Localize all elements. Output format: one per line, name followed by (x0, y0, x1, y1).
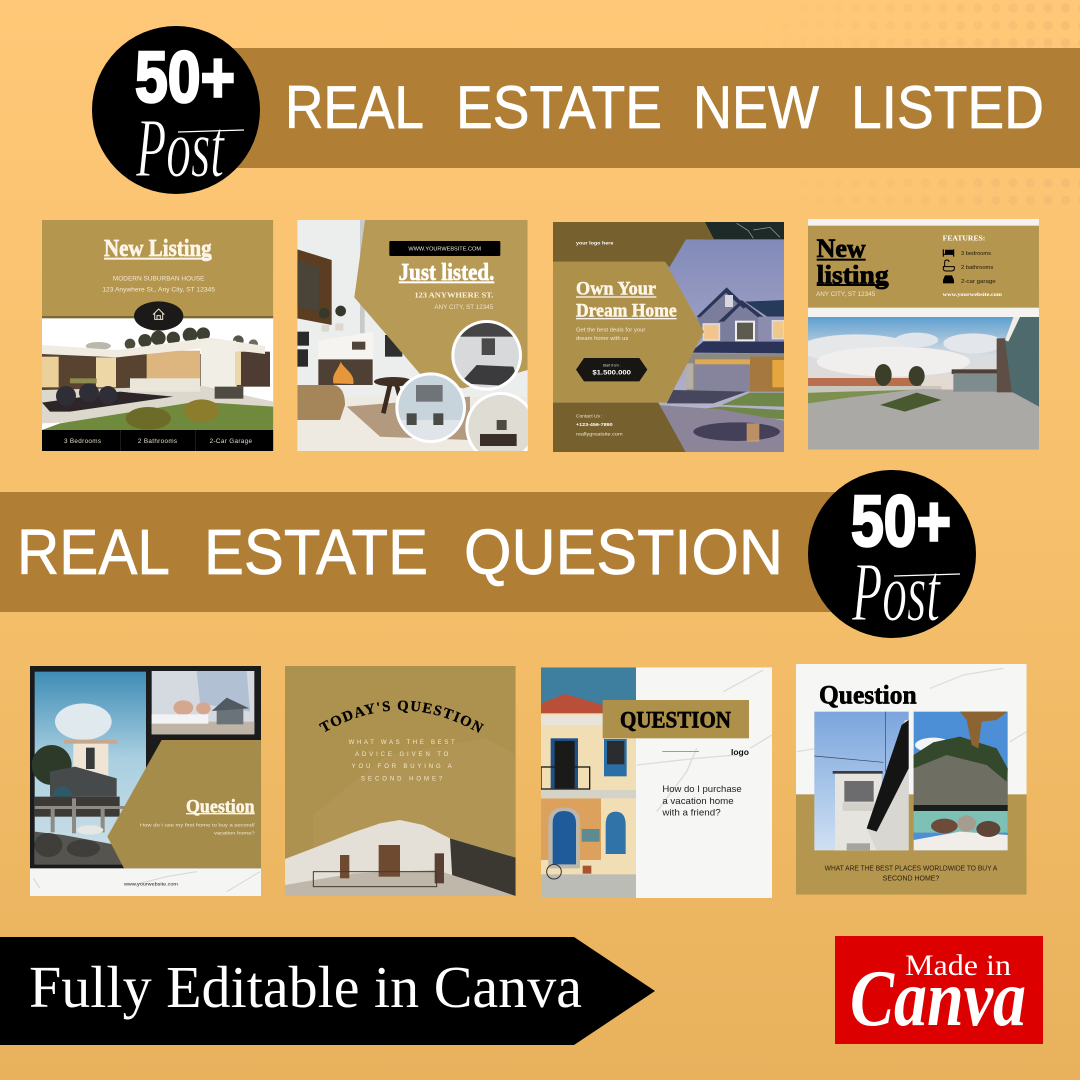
panel: question first home (30, 666, 261, 896)
address: ANY CITY, ST 12345 (434, 304, 494, 311)
photo: living room with fireplace (297, 220, 528, 451)
question text: SECOND HOME? (361, 776, 443, 782)
heading box: QUESTION (620, 707, 731, 733)
icon: car (943, 275, 954, 283)
features list (943, 234, 1002, 298)
gold arrow block (107, 740, 261, 868)
address: 123 ANYWHERE ST. (414, 290, 494, 299)
heading box (603, 700, 749, 738)
title: Question (819, 680, 917, 710)
panel: question best places (796, 664, 1027, 895)
title: Just listed. (399, 259, 494, 286)
icon: bath (943, 260, 954, 271)
photo circles (395, 320, 528, 451)
panel: today's question (285, 666, 516, 896)
heading: real estate question: QUESTION (464, 516, 783, 588)
question text: ADVICE GIVEN TO (355, 752, 449, 758)
address (415, 292, 493, 310)
badge: 50+ post middle: 50+ (851, 482, 951, 562)
url pill (389, 241, 500, 256)
marble footer: www.yourwebsite.com (124, 882, 178, 888)
question text: How do I use my first home to buy a second/ (140, 822, 255, 828)
question text: vacation home? (214, 831, 255, 837)
question text: WHAT WAS THE BEST (349, 740, 455, 746)
contact: Contact Us : (576, 413, 603, 419)
heading: real estate question (17, 516, 783, 588)
panel: new listing modern suburban house (42, 220, 273, 451)
photo: lakefront patio (800, 317, 1039, 450)
icon: house in black oval (134, 301, 183, 331)
photo: suburban house at dusk (658, 287, 784, 452)
address text: 123 Anywhere St., Any City, ST 12345 (102, 287, 215, 294)
features list: 3 bedrooms (961, 251, 991, 257)
photo: beach house (32, 672, 146, 864)
dark olive top band (553, 222, 714, 267)
logo: logo (731, 748, 749, 757)
heading: real estate question: ESTATE (204, 516, 428, 588)
description: Get the best deals for your (576, 328, 646, 334)
photo: blue-door house (541, 667, 636, 898)
curved heading: TODAY'S QUESTION (318, 700, 484, 733)
features list: 2 bathrooms (961, 265, 994, 271)
text: fully editable in canva: Fully Editable in Canva (29, 954, 582, 1020)
address text: MODERN SUBURBAN HOUSE (113, 276, 205, 283)
photo: rocky beach (914, 712, 1008, 850)
title (816, 239, 889, 297)
features bar: 3 Bedrooms (64, 438, 101, 445)
badge: 50+ post top (92, 26, 260, 195)
icon: bed (943, 249, 954, 257)
gold arrow block (553, 262, 704, 403)
price tag: $1.500.000 (592, 370, 631, 377)
title (398, 262, 494, 284)
title: listing (817, 259, 889, 289)
badge: 50+ post top: 50+ (135, 38, 235, 118)
heading: real estate new listed: REAL (285, 74, 424, 141)
title: ANY CITY, ST 12345 (816, 291, 876, 298)
banner: real estate question (0, 492, 840, 612)
features list: FEATURES: (943, 234, 985, 243)
question text: WHAT ARE THE BEST PLACES WORLDWIDE TO BUY A (825, 865, 998, 872)
question text (140, 823, 255, 834)
title: New Listing (104, 236, 212, 262)
heading: real estate question: REAL (17, 516, 170, 588)
description: dream home with us (576, 336, 629, 342)
contact (576, 413, 623, 438)
title: Dream Home (576, 300, 677, 321)
badge: 50+ post top: Post (135, 102, 226, 195)
question text (349, 740, 455, 782)
contact: reallygreatsite.com (576, 432, 623, 438)
dark olive bottom band (553, 403, 686, 452)
photo: white townhouse (814, 712, 909, 850)
question text (661, 784, 742, 818)
badge: made in canva: Canva (850, 955, 1026, 1043)
heading: real estate new listed: NEW (693, 74, 819, 141)
features list: 2-car garage (961, 279, 996, 285)
banner: real estate new listed (225, 48, 1080, 168)
photo: modern house (42, 327, 273, 430)
photo: small house model (152, 671, 254, 734)
question text (825, 865, 998, 883)
features bar: 2-Car Garage (210, 438, 252, 445)
question text: YOU FOR BUYING A (352, 764, 452, 770)
logo text: your logo here (576, 240, 614, 246)
features bar (42, 430, 273, 451)
heading: real estate new listed: ESTATE (456, 74, 662, 141)
question text: How do I purchase (662, 784, 742, 794)
contact: +123-456-7890 (576, 422, 613, 428)
title (576, 282, 677, 320)
price tag (576, 358, 647, 381)
title: New (817, 233, 866, 263)
heading: real estate new listed (285, 74, 1044, 141)
features list: www.yourwebsite.com (943, 292, 1002, 298)
question text: with a friend? (661, 808, 721, 818)
panel: question vacation home (541, 667, 772, 898)
address text (102, 276, 215, 294)
panel: own your dream home (553, 222, 784, 452)
arrow banner: fully editable (0, 937, 655, 1045)
panel: just listed (297, 220, 536, 463)
question text: SECOND HOME? (883, 876, 939, 883)
badge: made in canva: Made in (905, 949, 1011, 982)
marble footer (30, 868, 261, 896)
url pill: WWW.YOURWEBSITE.COM (408, 246, 481, 252)
question text: a vacation home (662, 796, 734, 806)
panel: new listing features (800, 219, 1039, 450)
title: Own Your (576, 279, 656, 300)
photo: corner building (285, 820, 516, 896)
heading: real estate new listed: LISTED (851, 74, 1044, 141)
features bar: 2 Bathrooms (138, 438, 177, 445)
badge: 50+ post middle (808, 470, 976, 639)
description (576, 328, 646, 340)
price tag: Start from : (603, 364, 621, 368)
title: Question (186, 796, 255, 817)
badge: 50+ post middle: Post (851, 546, 942, 639)
